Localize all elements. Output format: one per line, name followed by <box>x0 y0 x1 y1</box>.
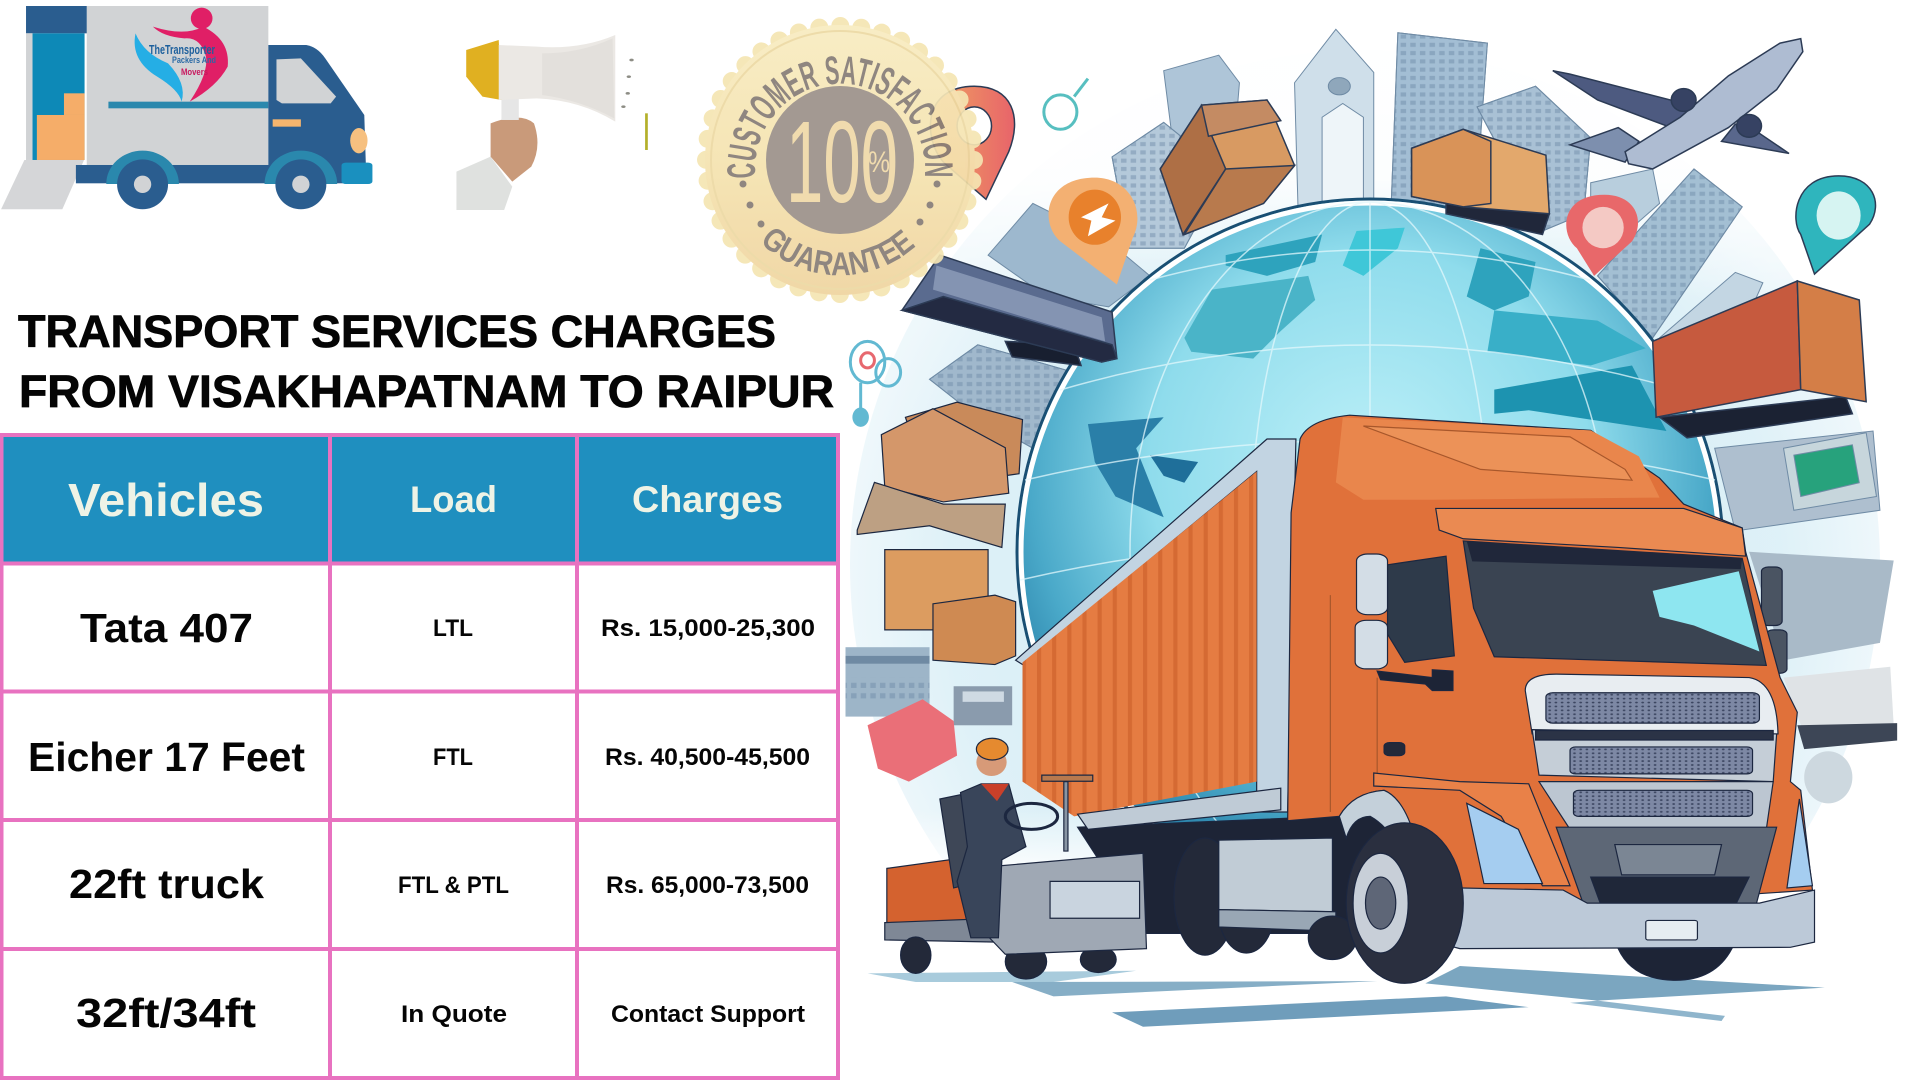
large parcel <box>1160 100 1295 234</box>
row: Eicher 17 Feet: Eicher 17 Feet <box>28 734 305 780</box>
headlights <box>1467 799 1812 888</box>
left city and van <box>846 647 1012 725</box>
row: 22ft truck: Rs. 65,000-73,500 <box>606 872 809 899</box>
road markings <box>868 966 1825 1027</box>
company logo text <box>149 42 216 77</box>
header labels: Load <box>410 479 497 520</box>
pink box <box>868 699 957 782</box>
mirrors <box>1355 554 1388 669</box>
shipping container <box>1653 281 1866 438</box>
right side mirrors <box>1761 567 1787 673</box>
illustration: global logistics scene <box>840 0 1920 1080</box>
percent sign: % <box>868 146 890 179</box>
row: 32ft/34ft: In Quote <box>401 1001 507 1028</box>
train carriage <box>902 255 1117 365</box>
truck rear chassis <box>1078 812 1432 933</box>
badge: 100% customer satisfaction guarantee <box>697 17 983 303</box>
teal ring markers <box>850 79 1088 427</box>
row: 22ft truck <box>69 861 809 907</box>
row: 32ft/34ft: Contact Support <box>611 1001 805 1028</box>
truck ramp <box>1 160 84 209</box>
door mirror arm <box>1377 670 1453 691</box>
company logo text: TheTransporter <box>149 42 215 57</box>
windshield <box>1463 541 1766 665</box>
row: 22ft truck: FTL & PTL <box>398 872 509 899</box>
guarantee caption: GUARANTEE <box>764 229 916 276</box>
continents <box>1088 228 1666 517</box>
cargo body <box>87 6 268 165</box>
rear wheels and fuel tank <box>1174 838 1357 959</box>
icon: hand holding megaphone <box>456 35 648 210</box>
curved caption: CUSTOMER SATISFACTION <box>727 56 953 178</box>
row: Tata 407: LTL <box>433 615 473 642</box>
lower bumper <box>1412 827 1815 949</box>
header labels: Vehicles <box>68 474 264 526</box>
row: Tata 407: Tata 407 <box>80 605 253 651</box>
company logo <box>135 8 228 102</box>
table header row <box>0 433 840 564</box>
100 numeral: 100 <box>786 97 898 227</box>
row: 32ft/34ft: 32ft/34ft <box>76 990 256 1036</box>
visor <box>1436 508 1746 556</box>
parcels on trolley <box>1412 129 1549 234</box>
side window <box>1388 556 1454 662</box>
icon: red map pin <box>930 86 1015 199</box>
grille <box>1525 674 1778 829</box>
title <box>18 306 834 417</box>
table: vehicles, load and charges <box>0 433 840 1080</box>
stacked parcels <box>857 402 1023 665</box>
company logo text: Packers And <box>172 55 216 65</box>
parcels in truck <box>37 93 85 160</box>
cab body <box>1288 415 1812 905</box>
city skyline behind globe <box>930 29 1880 531</box>
icon: red location pin <box>1566 195 1638 276</box>
icon: orange map pin <box>1049 178 1137 284</box>
row: Eicher 17 Feet: Rs. 40,500-45,500 <box>605 744 810 771</box>
company logo text: Movers <box>181 67 208 77</box>
globe <box>1017 199 1723 905</box>
row: 32ft/34ft <box>76 990 805 1036</box>
pale halo circle <box>850 50 1880 1080</box>
delivery truck logo illustration <box>1 6 372 209</box>
header labels: Charges <box>632 479 783 520</box>
front wheels <box>1339 790 1732 983</box>
airplane <box>1553 39 1803 169</box>
icon: teal map pin <box>1796 176 1876 274</box>
cab <box>268 45 366 167</box>
truck wheels <box>106 151 337 209</box>
header labels <box>68 474 783 526</box>
right side machinery <box>1749 552 1897 803</box>
floating objects <box>850 39 1876 438</box>
trailer container <box>1016 439 1296 829</box>
row: Tata 407 <box>80 605 815 651</box>
row: 22ft truck: 22ft truck <box>69 861 264 907</box>
row: Eicher 17 Feet <box>28 734 810 780</box>
main scene: truck, trolley and road <box>846 402 1897 1027</box>
title: TRANSPORT SERVICES CHARGES <box>18 306 776 357</box>
row: Eicher 17 Feet: FTL <box>433 744 473 771</box>
tug cart with driver <box>885 738 1146 979</box>
row: Tata 407: Rs. 15,000-25,300 <box>601 615 815 642</box>
badge dots <box>740 180 940 228</box>
title: FROM VISAKHAPATNAM TO RAIPUR <box>19 366 834 417</box>
